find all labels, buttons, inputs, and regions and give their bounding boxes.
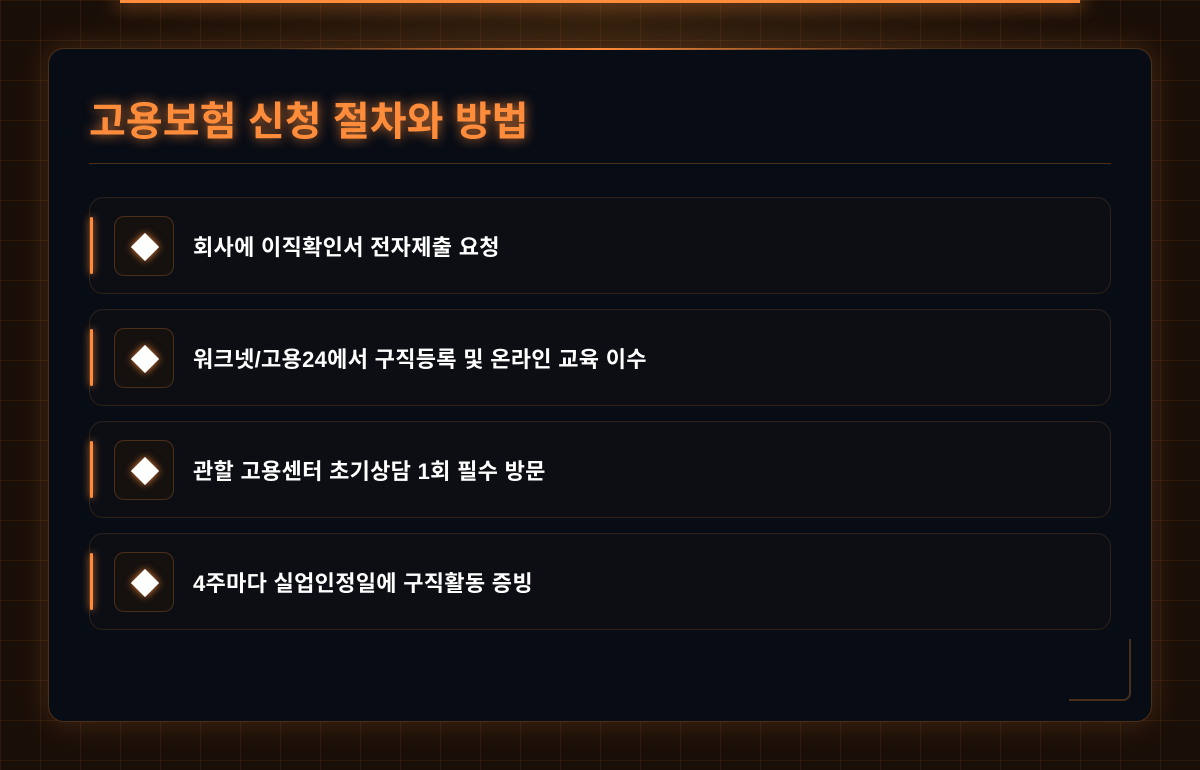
step 4 (89, 533, 1111, 630)
step 1: 회사에 이직확인서 전자제출 요청 (193, 235, 500, 260)
step 4: 4주마다 실업인정일에 구직활동 증빙 (193, 571, 533, 596)
corner bracket (1069, 639, 1131, 701)
step 2: 워크넷/고용24에서 구직등록 및 온라인 교육 이수 (193, 347, 647, 372)
step 2 (89, 309, 1111, 406)
title: 고용보험 신청 절차와 방법 (89, 100, 529, 144)
step 3: 관할 고용센터 초기상담 1회 필수 방문 (193, 459, 546, 484)
step 3 (89, 421, 1111, 518)
step 1 (89, 197, 1111, 294)
